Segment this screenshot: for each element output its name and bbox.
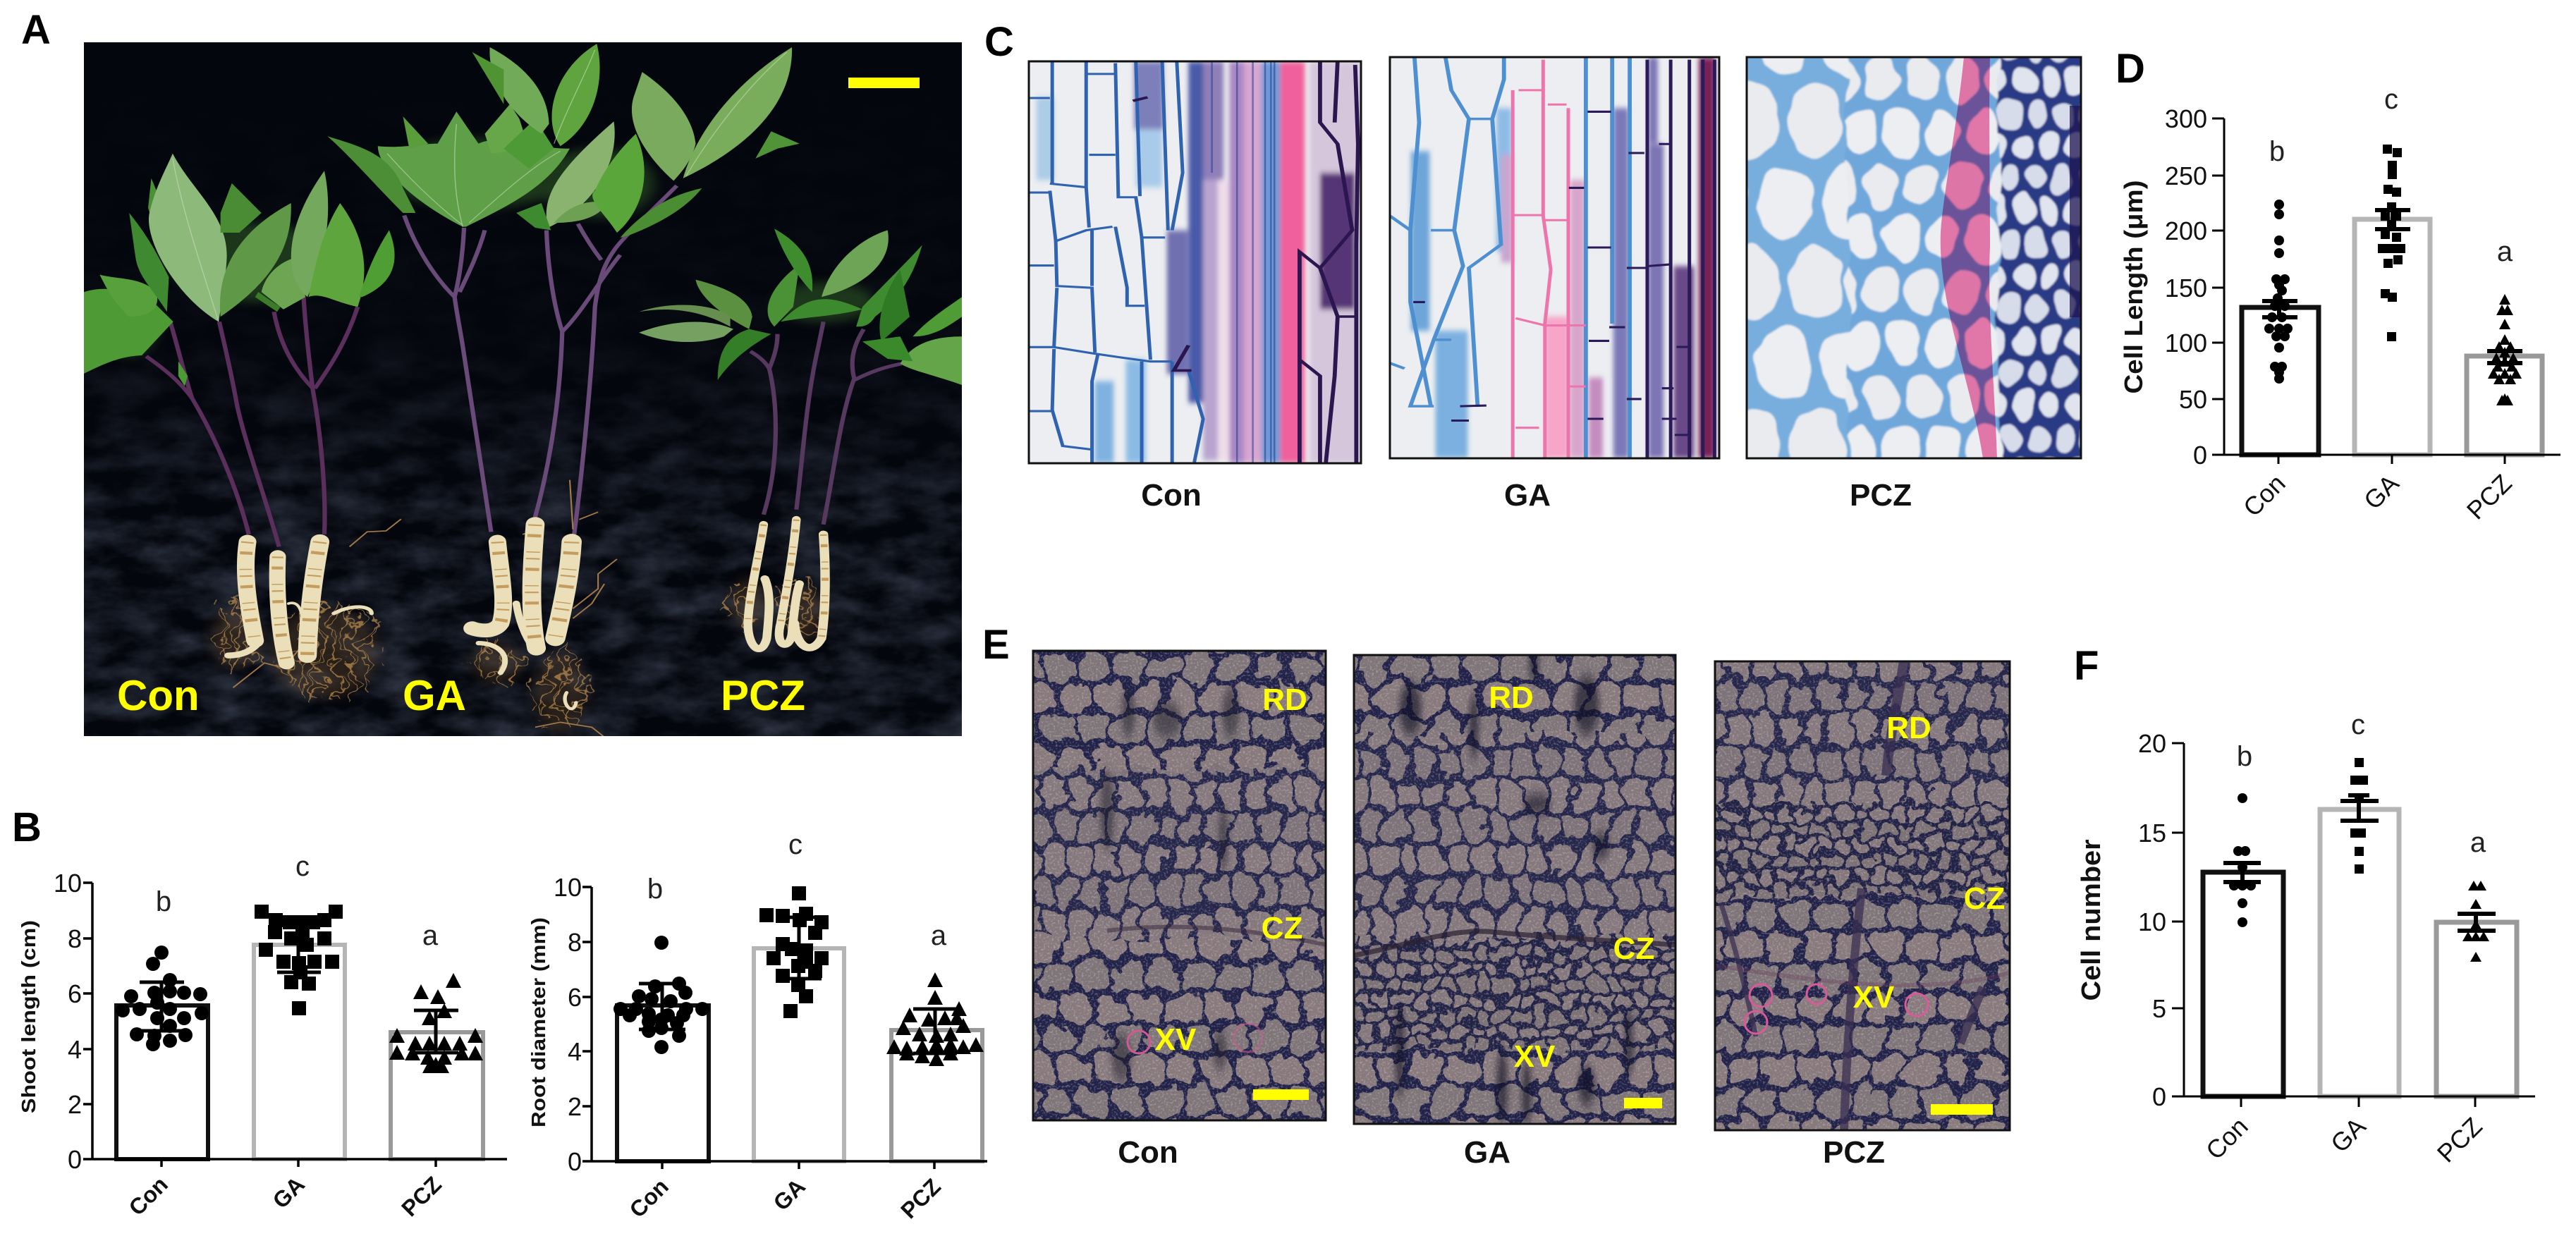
y tick labels: 2 [68,1090,82,1119]
x tick labels: Con [2238,469,2291,522]
fine root masses [211,579,824,732]
stained tissue bands [1411,57,1715,458]
stems of GA plants [404,185,677,534]
micrograph C: Con [1029,61,1361,463]
data points PCZ [2488,294,2522,405]
panel label D: D [2116,46,2145,92]
y tick labels: 250 [2165,161,2207,190]
y tick labels: 300 [2165,104,2207,133]
data points GA [2350,758,2368,874]
y tick labels: 0 [2152,1082,2166,1111]
significance letters [2269,84,2513,267]
cambium line and vessels [1107,927,1326,945]
data points Con [614,936,709,1054]
x tick labels: Con [2200,1112,2254,1165]
scale bar [1253,1089,1309,1100]
y tick labels: 10 [2138,907,2166,936]
region label CZ: CZ [1613,931,1654,966]
taproots [228,520,825,709]
y-axis title: Cell number [2077,839,2106,1001]
significance letters: c [788,829,802,860]
region label XV: XV [1155,1022,1197,1057]
blue cell walls [1390,57,1630,458]
y tick labels: 50 [2179,385,2207,414]
photo label Con: Con [117,672,200,719]
scale bar [1624,1098,1662,1108]
chart: root diameter [527,829,987,1223]
panel A: plant photograph [84,42,962,737]
leaf veins [173,50,787,322]
stray roots [233,480,617,737]
micrograph C: GA [1390,57,1719,458]
y tick labels: 8 [68,924,82,953]
region label RD: RD [1262,683,1307,717]
significance letters: c [2384,84,2398,115]
y-axis title: Root diameter (mm) [527,917,549,1127]
pink band [1941,57,1997,458]
significance letters: b [2237,741,2252,772]
dark cell walls [1413,60,1714,458]
micrograph E: Con [1015,635,1347,1135]
y tick labels: 0 [2193,441,2207,470]
significance letters [156,851,439,951]
panel label F: F [2074,643,2099,689]
axes [2212,118,2560,464]
photo label GA: GA [403,672,466,719]
significance letters: c [2351,709,2365,740]
bars [2203,809,2517,1096]
y tick labels [54,869,82,1174]
y tick labels: 8 [568,928,582,957]
x tick labels [2238,469,2517,525]
x tick labels: PCZ [2461,469,2517,525]
chart: shoot length [18,851,507,1221]
significance letters: c [295,851,310,882]
data points GA [255,905,343,1015]
y tick labels: 5 [2152,994,2166,1023]
cambium line and dark vessels [1354,931,1675,955]
caption GA for E: GA [1464,1135,1510,1170]
y tick labels: 100 [2165,329,2207,357]
data points Con [2264,200,2293,384]
y-axis title: Shoot length (cm) [18,920,39,1113]
x tick labels: GA [2358,469,2405,515]
region label XV: XV [1853,980,1895,1015]
bars [116,945,483,1159]
micrograph E: GA [1340,635,1692,1135]
panel label E: E [982,622,1010,668]
caption PCZ for C: PCZ [1850,478,1912,513]
stems of Con plants [146,297,358,546]
y tick labels [2138,729,2166,1111]
y tick labels: 15 [2138,819,2166,848]
photo label PCZ: PCZ [721,672,805,719]
y tick labels: 4 [568,1037,582,1066]
x tick labels: PCZ [396,1171,446,1221]
data points Con [2229,793,2256,927]
x tick labels: GA [268,1171,310,1213]
scale bar [848,78,920,88]
data points Con [116,946,209,1051]
x tick labels: GA [769,1173,810,1216]
significance letters: a [931,920,947,951]
data points GA [759,886,829,1018]
axes [83,883,507,1167]
error bars [140,919,458,1053]
dark cell walls at right [1133,61,1358,462]
y tick labels: 150 [2165,274,2207,302]
leaves of GA plants [327,44,800,238]
y tick labels: 10 [554,873,582,902]
error bars [2262,210,2522,363]
stained tissue bands [1037,61,1361,463]
leaves of PCZ plants [639,228,962,385]
caption Con for C: Con [1141,478,1202,513]
root surface speckle [245,520,825,663]
x tick labels [625,1173,946,1223]
y tick labels [554,873,582,1176]
micrograph C: PCZ [1735,42,2094,472]
chart: cell number [2077,709,2535,1168]
y-axis title: Cell Length (μm) [2119,180,2148,393]
significance letters: b [2269,136,2285,167]
cell walls [1029,61,1203,462]
significance letters: a [2497,236,2513,267]
panel label C: C [984,19,1014,65]
scale bar [1931,1104,1993,1115]
region label CZ: CZ [1964,881,2005,916]
x tick labels [124,1171,446,1221]
stems of PCZ plants [750,322,901,525]
y tick labels: 20 [2138,729,2166,758]
y tick labels: 10 [54,869,82,898]
panel label B: B [12,804,42,850]
x tick labels [2200,1112,2488,1168]
dark rays and vessels [1721,661,1983,1130]
significance letters: a [422,920,439,951]
significance letters: a [2470,827,2486,858]
error bars [639,917,957,1053]
caption Con for E: Con [1118,1135,1178,1170]
data points PCZ [389,973,483,1073]
y tick labels [2165,104,2207,470]
significance letters: b [647,874,663,905]
y tick labels: 4 [68,1035,82,1064]
axes [2172,743,2535,1107]
bars [2242,219,2542,455]
y tick labels: 0 [68,1145,82,1174]
x tick labels: PCZ [896,1173,946,1223]
bars [617,948,982,1161]
panel label A: A [21,7,51,53]
region label XV: XV [1514,1039,1556,1074]
caption PCZ for E: PCZ [1823,1135,1885,1170]
x tick labels: Con [124,1171,173,1220]
pink cell walls [1513,60,1586,458]
region label CZ: CZ [1262,911,1302,946]
chart: cell length [2119,84,2560,525]
data points PCZ [2462,881,2489,962]
data points PCZ [886,972,984,1066]
axes [582,887,987,1169]
significance letters [647,829,947,951]
y tick labels: 2 [568,1092,582,1121]
significance letters: b [156,886,171,917]
micrograph E: PCZ [1699,642,2024,1142]
region label RD: RD [1886,711,1931,745]
foliage underlay [94,139,875,356]
x tick labels: Con [625,1173,673,1223]
x tick labels: PCZ [2431,1112,2488,1168]
y tick labels: 6 [568,983,582,1012]
y tick labels: 6 [68,979,82,1008]
leaves of Con plants [84,154,395,386]
region label RD: RD [1489,680,1534,715]
error bars [2223,795,2496,931]
y tick labels: 200 [2165,216,2207,245]
x tick labels: GA [2325,1112,2371,1158]
data points GA [2378,145,2405,341]
y tick labels: 0 [568,1147,582,1176]
caption GA for C: GA [1504,478,1551,513]
significance letters [2237,709,2486,858]
